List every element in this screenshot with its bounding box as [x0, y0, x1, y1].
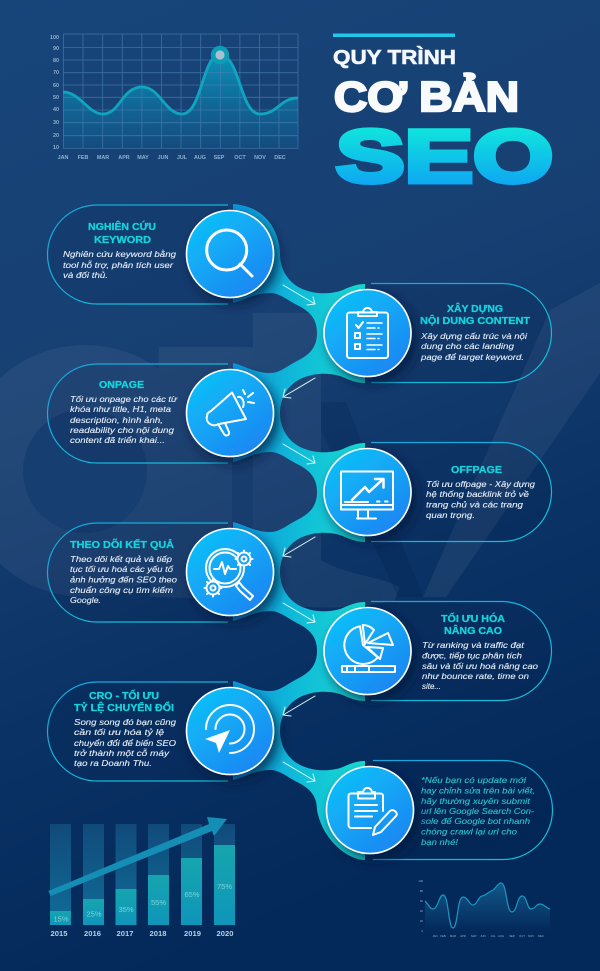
axis labels: 60	[420, 899, 423, 903]
icon: clipboard with pencil	[348, 788, 397, 835]
year labels: 2015	[51, 929, 68, 938]
y axis labels	[50, 35, 59, 151]
description: readability cho nội dung	[70, 425, 174, 435]
trend arrow	[48, 817, 227, 896]
grid	[63, 34, 298, 148]
panel: onpage	[47, 364, 273, 463]
month labels: MAY	[471, 934, 477, 938]
note text: hay chỉnh sửa trên bài viết,	[421, 786, 535, 796]
heading	[74, 690, 174, 714]
pill outline	[371, 284, 552, 382]
title line: quy trinh: QUY TRÌNH	[333, 46, 456, 69]
heading: NGHIÊN CỨU	[88, 221, 156, 233]
heading	[88, 221, 156, 246]
month labels: JAN	[58, 155, 68, 161]
axis labels	[418, 879, 423, 933]
heading	[420, 303, 530, 327]
icon: checklist clipboard	[347, 308, 388, 358]
description: tục tối ưu hoá các yếu tố	[70, 564, 174, 574]
axis labels: 80	[420, 889, 423, 893]
percent labels: 55%	[151, 898, 166, 907]
description: tool hỗ trợ, phân tích user	[63, 260, 174, 270]
description: page để target keyword.	[420, 352, 524, 362]
panel: nghien cuu keyword	[47, 205, 273, 304]
y axis labels: 50	[53, 95, 59, 101]
heading	[441, 613, 505, 637]
description: cần tối ưu hóa tỷ lệ	[74, 727, 164, 737]
description: Tối ưu onpage cho các từ	[70, 394, 178, 404]
heading: THEO DÕI KẾT QUẢ	[70, 539, 174, 551]
arrows on ribbon	[283, 285, 315, 782]
description: dung cho các landing	[421, 341, 514, 351]
pill outline	[47, 523, 228, 622]
title line: co ban: CƠ BẢN	[334, 72, 519, 120]
note text: hãy thường xuyên submit	[421, 796, 531, 806]
description	[426, 479, 535, 520]
description: content đã triển khai...	[70, 435, 165, 445]
y axis labels: 80	[53, 58, 59, 64]
description: site...	[422, 681, 441, 691]
percent labels: 75%	[217, 882, 232, 891]
step circle	[324, 448, 411, 536]
curve line	[425, 883, 550, 928]
heading: ONPAGE	[99, 380, 144, 391]
title rule	[333, 34, 455, 37]
title	[333, 34, 553, 198]
description: Nghiên cứu keyword bằng	[63, 249, 176, 259]
heading: KEYWORD	[94, 235, 151, 246]
curve line	[63, 55, 298, 114]
percent labels: 65%	[184, 890, 200, 899]
description: ảnh hưởng đến SEO theo	[70, 574, 177, 584]
y axis labels: 40	[53, 107, 59, 113]
pill outline	[373, 760, 552, 860]
month labels: APR	[118, 155, 130, 161]
bar backgrounds	[50, 824, 235, 925]
chart: yearly bar chart	[48, 817, 235, 938]
step circle	[186, 528, 274, 616]
description: sâu và tối ưu hoá nâng cao	[422, 661, 538, 671]
description: được, tiếp tục phân tích	[422, 650, 522, 660]
description: và đối thủ.	[63, 270, 108, 280]
y axis labels: 30	[53, 120, 59, 126]
month labels: AUG	[194, 155, 206, 161]
panel: note	[326, 760, 552, 860]
note text: url lên Google Search Con-	[421, 806, 534, 816]
percent labels: 15%	[53, 914, 69, 924]
description: Tối ưu offpage - Xây dựng	[426, 479, 535, 489]
description: Google.	[70, 595, 101, 605]
panel: offpage	[324, 442, 552, 542]
bar values	[50, 845, 235, 925]
month labels: JUL	[177, 155, 188, 161]
panel: toi uu hoa nang cao	[324, 602, 552, 700]
description	[74, 717, 176, 768]
month labels	[432, 934, 544, 938]
description: chuyển đổi để biến SEO	[74, 738, 176, 748]
icon: megaphone	[207, 390, 254, 435]
title line: SEO: SEO	[336, 115, 553, 198]
connector ribbon	[233, 204, 365, 860]
month labels: FEB	[78, 155, 88, 161]
year labels: 2018	[150, 929, 166, 938]
heading: OFFPAGE	[451, 465, 502, 476]
axis labels: 40	[420, 909, 423, 913]
heading: XÂY DỰNG	[447, 303, 503, 315]
month labels: JUN	[480, 934, 486, 938]
month labels: JUN	[158, 155, 168, 161]
month labels: JAN	[432, 934, 438, 938]
step circle	[326, 766, 414, 854]
note text: *Nếu bạn có update mới	[421, 775, 527, 785]
month labels: SEP	[509, 934, 515, 938]
chart: monthly line chart	[50, 34, 298, 161]
step circle	[324, 608, 411, 694]
year labels: 2019	[184, 929, 201, 938]
y axis labels: 10	[53, 145, 59, 151]
description: description, hình ảnh,	[70, 415, 163, 425]
y axis labels: 70	[53, 70, 59, 76]
y axis labels: 90	[53, 46, 59, 52]
month labels: SEP	[214, 155, 225, 161]
description: Xây dựng cấu trúc và nội	[420, 331, 528, 341]
year labels: 2020	[217, 929, 233, 938]
y axis labels: 100	[50, 35, 59, 41]
description	[420, 331, 528, 362]
month labels: OCT	[519, 934, 525, 938]
description: khóa như title, H1, meta	[70, 404, 171, 414]
percent labels: 35%	[118, 905, 134, 914]
panel: cro toi uu ty le chuyen doi	[47, 682, 273, 781]
heading: NỘI DUNG CONTENT	[420, 315, 530, 327]
percent labels: 25%	[86, 910, 102, 918]
heading: TỶ LỆ CHUYỂN ĐỔI	[74, 702, 174, 714]
month labels	[58, 155, 286, 161]
month labels: JUL	[491, 934, 496, 938]
panel: xay dung noi dung content	[324, 284, 552, 382]
month labels: FEB	[440, 934, 446, 938]
icon: magnifier	[207, 230, 252, 276]
step circle	[186, 210, 274, 298]
panel: theo doi ket qua	[47, 523, 273, 622]
description: quan trọng.	[426, 510, 475, 520]
step circle	[186, 688, 274, 774]
description	[70, 394, 178, 445]
description: Theo dõi kết quả và tiếp	[70, 554, 172, 564]
description: tạo ra Doanh Thu.	[74, 758, 152, 768]
axis labels: 100	[418, 879, 423, 883]
y axis labels: 20	[53, 133, 59, 139]
heading: NÂNG CAO	[444, 625, 502, 637]
pill outline	[47, 682, 228, 781]
icon: cursor with rings	[205, 705, 254, 753]
note text: bạn nhé!	[421, 837, 459, 847]
month labels: AUG	[498, 934, 504, 938]
heading: CRO - TỐI ƯU	[89, 690, 159, 702]
pill outline	[47, 364, 228, 463]
description	[422, 640, 538, 691]
month labels: MAR	[450, 934, 456, 938]
description	[63, 249, 176, 280]
year labels: 2016	[84, 929, 101, 938]
month labels: MAR	[97, 155, 109, 161]
icon: pie chart	[342, 625, 395, 672]
pill outline	[371, 602, 552, 700]
year labels: 2017	[117, 929, 133, 938]
note text: chóng crawl lại url cho	[421, 826, 517, 836]
area under curve	[425, 883, 550, 931]
peak marker	[211, 46, 229, 64]
axis labels: 20	[420, 919, 423, 923]
pill outline	[371, 442, 552, 542]
y axis labels: 60	[53, 83, 59, 89]
month labels: APR	[460, 934, 466, 938]
description: hệ thống backlink trỏ về	[426, 489, 529, 499]
description: Từ ranking và traffic đạt	[422, 640, 525, 650]
month labels: DEC	[538, 934, 544, 938]
step circle	[186, 370, 274, 456]
description: Song song đó bạn cũng	[74, 717, 176, 727]
description: trở thành một cỗ máy	[74, 748, 170, 758]
heading: TỐI ƯU HÓA	[441, 613, 505, 625]
description: như bounce rate, time on	[422, 671, 529, 681]
step circle	[324, 290, 411, 376]
description: chuẩn công cụ tìm kiếm	[70, 585, 173, 595]
area under curve	[63, 55, 298, 148]
month labels: NOV	[254, 155, 266, 161]
pill outline	[47, 205, 228, 304]
icon: monitor with rising chart	[341, 472, 393, 518]
axis labels: 0	[421, 929, 423, 933]
month labels: DEC	[274, 155, 286, 161]
description: trang chủ và các trang	[426, 500, 523, 510]
month labels: MAY	[137, 155, 149, 161]
month labels: NOV	[528, 934, 534, 938]
description	[70, 554, 177, 605]
month labels: OCT	[234, 155, 246, 161]
percent labels	[53, 882, 232, 924]
background watermark letters	[0, 283, 600, 608]
chart: small line chart	[418, 879, 550, 938]
icon: magnifier with gears	[204, 549, 253, 600]
year labels	[51, 929, 233, 938]
note text: sole để Google bot nhanh	[421, 816, 530, 826]
note text	[421, 775, 535, 847]
